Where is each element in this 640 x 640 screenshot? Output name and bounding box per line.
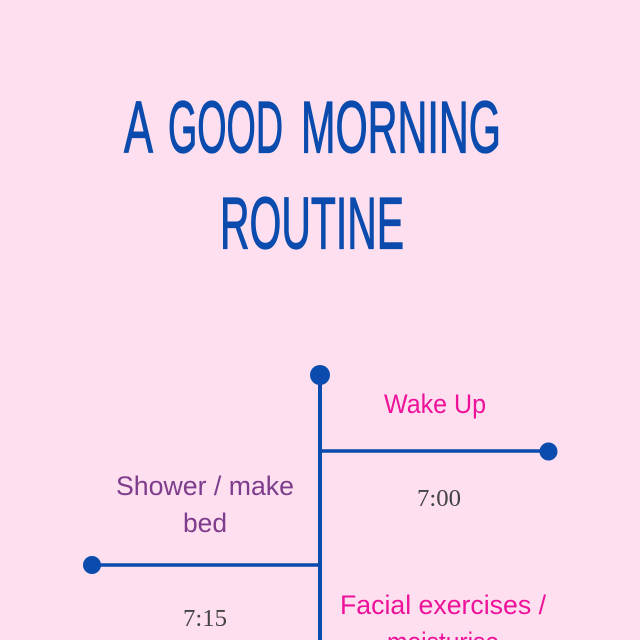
step: shower / make bed: Shower / make xyxy=(116,471,294,501)
step: wake up: Wake Up xyxy=(384,389,486,419)
timeline xyxy=(83,365,558,640)
step: wake up xyxy=(384,389,486,512)
title xyxy=(124,88,501,264)
step: wake up: 7:00 xyxy=(417,486,461,512)
title: GOOD xyxy=(168,88,283,168)
step: shower / make bed xyxy=(116,471,294,632)
title: A xyxy=(124,88,153,168)
step: facial exercises / moisturise: Facial exercises / xyxy=(340,590,546,620)
step: facial exercises / moisturise xyxy=(340,590,546,640)
step: shower / make bed: 7:15 xyxy=(183,606,227,632)
step: shower / make bed: bed xyxy=(183,508,227,538)
title: ROUTINE xyxy=(220,184,404,264)
